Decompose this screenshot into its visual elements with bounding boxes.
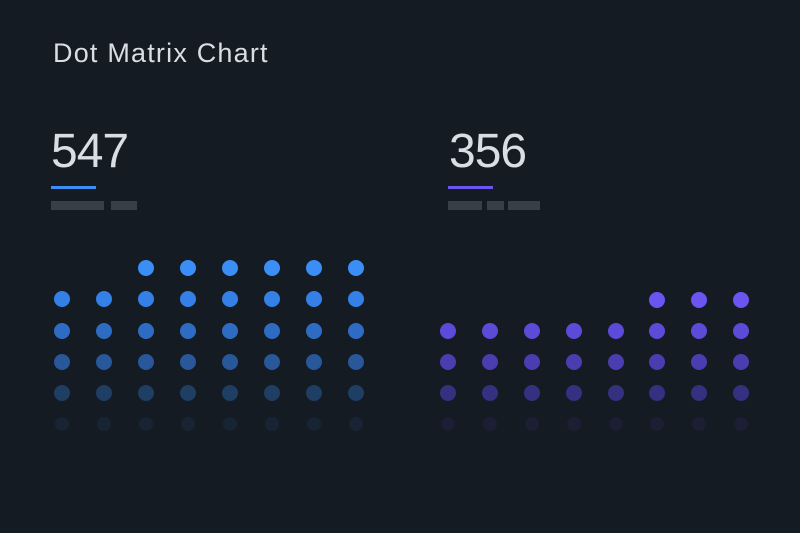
chart: purple dots xyxy=(440,292,749,431)
placeholder bars left xyxy=(51,201,137,210)
stat: 356: 356 xyxy=(449,125,526,178)
chart: blue dots xyxy=(54,260,364,431)
underline blue xyxy=(51,186,96,189)
stat: 547: 547 xyxy=(51,125,128,178)
placeholder bars right xyxy=(448,201,540,210)
underline purple xyxy=(448,186,493,189)
title: Dot Matrix Chart xyxy=(53,38,269,68)
